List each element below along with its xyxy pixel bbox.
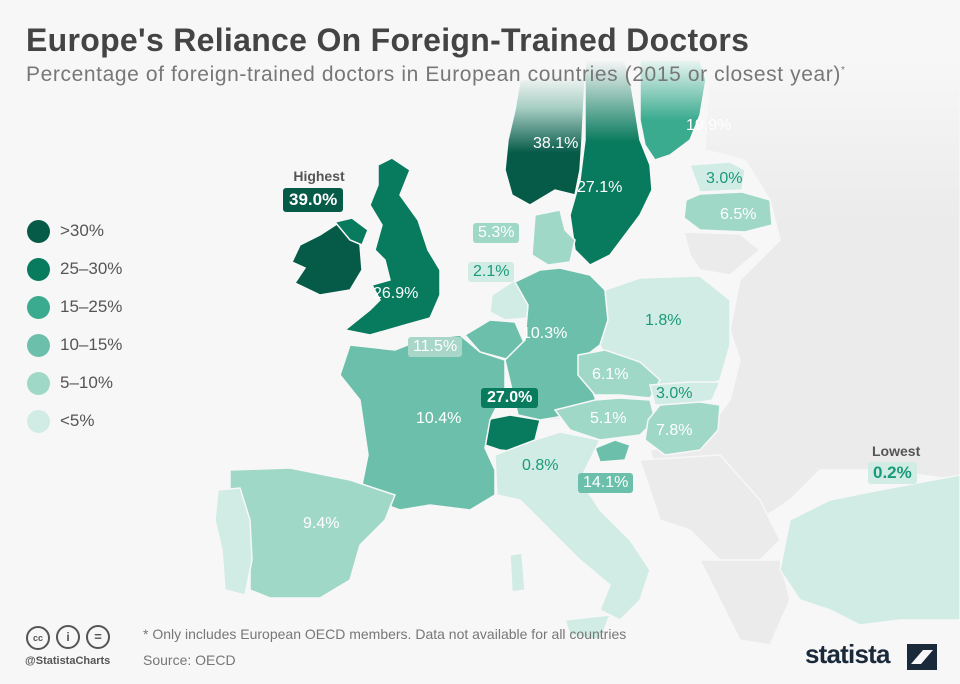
logo: statista — [805, 639, 890, 669]
footer icons: cc — [33, 633, 43, 643]
Poland — [600, 276, 730, 390]
legend: >30% — [60, 221, 104, 240]
legend: 25–30% — [60, 259, 122, 278]
label Denmark: 5.3% — [478, 224, 514, 241]
label Finland: 19.9% — [686, 117, 731, 134]
logo — [805, 639, 937, 670]
callout: lowest: Lowest — [872, 443, 920, 459]
label Belgium: 11.5% — [413, 338, 457, 355]
label Poland: 1.8% — [645, 312, 681, 329]
footer handle: @StatistaCharts — [25, 655, 110, 667]
label Ireland — [283, 188, 343, 212]
label Sweden: 27.1% — [577, 179, 622, 196]
Sicily — [565, 615, 610, 640]
Sardinia — [510, 553, 525, 592]
title: Europe's Reliance On Foreign-Trained Doctors — [26, 22, 749, 58]
label UK: 26.9% — [373, 285, 418, 302]
label Czechia: 6.1% — [592, 366, 628, 383]
Slovenia — [595, 440, 630, 462]
UK — [345, 158, 440, 335]
Czechia — [578, 350, 660, 398]
label Italy: 0.8% — [522, 457, 558, 474]
legend — [27, 220, 122, 433]
France — [340, 335, 505, 510]
label Hungary: 7.8% — [656, 422, 692, 439]
legend: 10–15% — [60, 335, 122, 354]
label Norway: 38.1% — [533, 135, 578, 152]
Italy — [495, 432, 650, 620]
legend: 15–25% — [60, 297, 122, 316]
Netherlands — [490, 280, 530, 320]
label Austria: 5.1% — [590, 410, 626, 427]
Portugal — [215, 488, 252, 595]
label Germany: 10.3% — [522, 325, 567, 342]
label Netherlands: 2.1% — [473, 263, 509, 280]
label Turkey — [868, 462, 917, 484]
footnote: * Only includes European OECD members. Data not available for all countries — [143, 626, 626, 642]
Hungary — [645, 402, 720, 455]
label France: 10.4% — [416, 410, 461, 427]
footer icons — [26, 625, 110, 650]
Switzerland — [485, 415, 540, 452]
label Ireland: 39.0% — [289, 190, 337, 209]
label Netherlands — [468, 262, 514, 282]
label Estonia: 3.0% — [706, 170, 742, 187]
subtitle: Percentage of foreign-trained doctors in European countries (2015 or closest year)* — [26, 63, 845, 86]
label Slovenia: 14.1% — [583, 474, 628, 491]
Northern Ireland — [335, 218, 368, 245]
footer icons: = — [94, 629, 102, 644]
label Latvia: 6.5% — [720, 206, 756, 223]
source: Source: OECD — [143, 652, 236, 668]
Lithuania — [684, 232, 760, 275]
label Slovakia: 3.0% — [656, 385, 692, 402]
label Denmark — [473, 223, 519, 243]
Belgium — [465, 320, 525, 360]
Latvia — [684, 192, 772, 232]
Spain — [230, 468, 395, 598]
Finland — [640, 60, 706, 160]
legend: <5% — [60, 411, 94, 430]
Estonia — [690, 162, 745, 192]
Denmark — [532, 210, 575, 265]
label Switzerland: 27.0% — [487, 389, 532, 406]
label Spain: 9.4% — [303, 515, 339, 532]
gray background countries — [540, 60, 960, 645]
callout: highest: Highest — [293, 168, 345, 184]
Slovakia — [650, 382, 720, 405]
Norway — [505, 75, 585, 205]
legend: 5–10% — [60, 373, 113, 392]
label Switzerland — [481, 388, 538, 408]
Germany — [505, 268, 608, 420]
Turkey — [780, 475, 960, 625]
label Belgium — [408, 337, 462, 357]
label Turkey: 0.2% — [873, 463, 912, 482]
Sweden — [570, 60, 652, 265]
Austria — [555, 398, 655, 440]
footer icons: i — [66, 630, 70, 644]
label Slovenia — [578, 473, 633, 493]
Ireland — [292, 222, 362, 295]
